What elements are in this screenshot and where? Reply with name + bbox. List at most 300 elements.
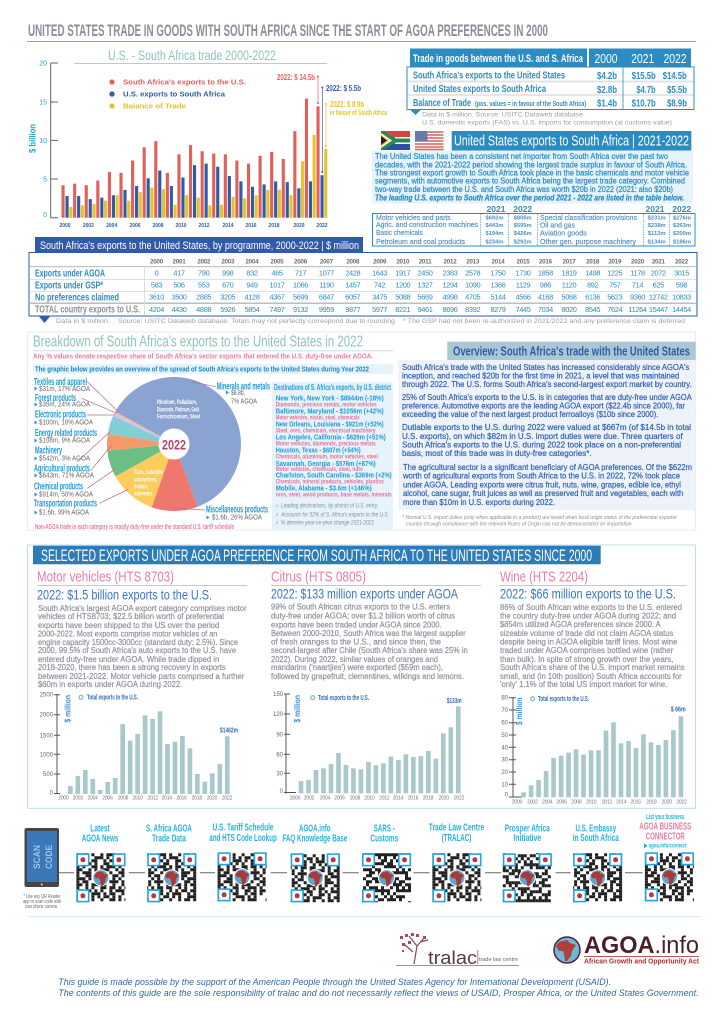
row: exports under AGOA: 2383 xyxy=(442,268,458,278)
column: wine xyxy=(500,569,687,689)
column: wine: the country duty-free under AGOA during 2022; and xyxy=(500,612,676,620)
text block: overview: through 2022. The U.S. forms South Africa's second-largest export market by country. xyxy=(402,380,692,389)
sector labels: $914m, 50% AGOA xyxy=(39,492,93,498)
heading: overview xyxy=(447,342,696,360)
icon: South Africa flag xyxy=(381,131,410,150)
donut chart: 2022 exports by sector: Cars, catalytic xyxy=(134,470,163,476)
row: exports under AGOA: 417 xyxy=(173,268,185,278)
y axis: 5 xyxy=(43,176,47,184)
row: total country exports: 4888 xyxy=(196,305,211,314)
row: no preferences claimed: 5144 xyxy=(490,293,506,302)
row: exports under AGOA: 1643 xyxy=(372,268,387,278)
column: wine: Wine (HTS 2204) xyxy=(500,569,588,586)
row: exports under GSP: 1457 xyxy=(345,281,361,290)
table: leading U.S. exports: 2021 xyxy=(646,204,665,214)
bar chart: wine: 2022 xyxy=(676,800,687,806)
text block: U.S. exports summary: The strongest export growth to South Africa took place in the basic chemicals and motor vehicle xyxy=(375,168,690,178)
bar chart: motor vehicles: 2006 xyxy=(102,796,113,802)
sector labels: $8.8b, xyxy=(231,390,245,397)
table: leading U.S. exports: 2021 xyxy=(487,204,506,214)
row: no preferences claimed: 6847 xyxy=(319,293,334,302)
bar chart: motor vehicles: Total exports to the U.S. xyxy=(87,695,138,702)
sector labels: $35m, 24% AGOA xyxy=(39,402,90,408)
column: citrus: duty-free under AGOA; over $1.2 billion worth of citrus xyxy=(271,612,455,620)
panel: destinations by U.S. district: New Orleans, Louisiana - $921m (+52%) xyxy=(276,420,384,429)
bar chart: wine: 2000 xyxy=(512,800,523,806)
row: no preferences claimed: 4168 xyxy=(538,293,553,302)
table: leading U.S. exports: Aviation goods xyxy=(540,228,587,238)
row: exports under GSP xyxy=(35,280,687,292)
row: exports under AGOA xyxy=(35,268,689,280)
year header: 2017 xyxy=(563,258,576,266)
bar chart: wine: $ million xyxy=(514,698,524,725)
year header: 2005 xyxy=(271,258,284,266)
bar chart: motor vehicles: 2012 xyxy=(148,796,158,802)
text block: overview: U.S. exports), on which $82m in U.S. import duties were due. Three quarters of xyxy=(402,432,683,441)
bar chart: motor vehicles: 2022 xyxy=(222,796,232,802)
year header: 2010 xyxy=(396,258,410,266)
QR: U.S. Tariff Schedule and HTS Code Lookup: U.S. Tariff Schedule xyxy=(212,823,274,834)
QR: AGOA Business Connector: CONNECTOR xyxy=(646,831,685,842)
sector labels: $1.6b, 26% AGOA xyxy=(212,514,262,522)
donut chart: 2022 exports by sector: bodies, xyxy=(134,484,148,490)
column: wine: 2022: $66 million exports to the U.S. xyxy=(500,587,676,602)
text block: overview: exceeding the value of the next largest product ferroalloys ($10b since 2000). xyxy=(402,410,658,419)
table: trade in goods between the U.S. and S. Africa: $1.4b xyxy=(597,98,617,110)
row: total country exports: 8221 xyxy=(395,305,411,314)
panel: destinations by U.S. district: Destinations of S. Africa's exports, by U.S. district xyxy=(274,382,391,392)
row: total country exports: 7034 xyxy=(538,305,553,314)
row: exports under AGOA: 3015 xyxy=(674,268,689,278)
panel: destinations by U.S. district: Chemicals, aluminium, motor vehicles, steel xyxy=(276,454,378,461)
row: no preferences claimed: 12742 xyxy=(649,293,668,302)
bar chart: citrus: $133m xyxy=(447,696,462,705)
sector labels: Miscellaneous products xyxy=(206,505,268,516)
column: motor vehicles xyxy=(37,569,247,689)
row: total country exports: 8020 xyxy=(561,305,577,314)
row: exports under AGOA: 1178 xyxy=(630,268,645,278)
y axis: 20 xyxy=(39,60,47,68)
row: exports under GSP: 670 xyxy=(222,281,234,290)
row: total country exports: 5926 xyxy=(220,305,236,314)
row: total country exports: TOTAL country exports to U.S. xyxy=(35,304,140,316)
year header: 2007 xyxy=(320,258,334,266)
donut chart: 2022 exports by sector xyxy=(107,377,241,511)
sector labels: Transportation products xyxy=(34,499,97,510)
row: total country exports: 7624 xyxy=(607,305,623,314)
sector labels: Forest products xyxy=(35,393,76,404)
QR: U.S. Embassy in South Africa: U.S. Embassy xyxy=(575,823,616,834)
bar chart: wine: 2018 xyxy=(646,800,657,806)
bar chart: citrus: 30 xyxy=(276,771,284,777)
column: motor vehicles: 2022: $1.5 billion exports to the U.S. xyxy=(37,588,212,603)
panel: destinations by U.S. district: Charlston, South Carolina - $369m (+2%) xyxy=(276,470,392,479)
bar chart: wine: 20 xyxy=(501,770,509,776)
table: trade in goods between the U.S. and S. Africa: (pos. values = in favour of the South Africa) xyxy=(475,101,586,108)
text block: overview: alcohol, cane sugar, fruit juices as well as preserved fruit and vegetables, each with xyxy=(403,489,684,498)
panel: destinations by U.S. district: ores, steel, wood products, base metals, minerals xyxy=(276,492,392,499)
x axis labels: 2022 xyxy=(316,223,328,229)
x axis labels: 2004 xyxy=(106,223,117,229)
donut chart: 2022 exports by sector: converters, xyxy=(134,478,157,484)
x axis labels: 2012 xyxy=(198,223,210,229)
column: citrus: followed by grapefruit, clementines, wilkings and lemons. xyxy=(271,672,464,681)
table: leading U.S. exports: Petroleum and coal products xyxy=(376,237,465,246)
column: citrus: Citrus (HTS 0805) xyxy=(271,569,366,586)
row: exports under AGOA: 1730 xyxy=(515,268,531,278)
column: wine: sizeable volume of trade did not claim AGOA status xyxy=(500,629,673,638)
row: total country exports: 11264 xyxy=(628,305,647,314)
bar chart: wine: 40 xyxy=(501,745,509,751)
bar chart: wine: 2004 xyxy=(542,800,553,806)
QR: S. Africa AGOA Trade Data xyxy=(146,823,196,902)
QR: U.S. Tariff Schedule and HTS Code Lookup: and HTS Code Lookup xyxy=(209,833,277,844)
bar chart: wine: 30 xyxy=(501,758,509,764)
year header: 2018 xyxy=(586,258,600,266)
row: exports under AGOA: 1498 xyxy=(585,268,600,278)
column: citrus: second-largest after Chile (South Africa's share was 25% in xyxy=(271,646,468,655)
row: exports under GSP: 1090 xyxy=(465,281,480,290)
callout: 2022 values: 2022: $ 14.5b xyxy=(277,73,315,82)
table: leading U.S. exports: $276m xyxy=(673,216,691,222)
sector labels: Electronic products xyxy=(35,409,86,420)
bar chart: motor vehicles: 2020 xyxy=(207,796,218,802)
bar chart: wine: 0 xyxy=(505,792,509,798)
column: motor vehicles: vehicles of HTS8703; $22.5 billion worth of preferential xyxy=(38,612,224,621)
QR: Prosper Africa Initiative xyxy=(504,823,551,902)
sector labels: Minerals and metals xyxy=(217,381,270,392)
legend: U.S. exports to South Africa xyxy=(123,90,226,98)
QR: SARS - Customs xyxy=(363,823,410,902)
column: motor vehicles: $60m in exports under AGOA during 2022. xyxy=(38,680,182,689)
text block: overview: Dutiable exports to the U.S. during 2022 were valued at $667m (of $14.5b in total xyxy=(402,423,691,432)
row: exports under GSP: 1190 xyxy=(319,281,334,290)
text block: overview: South Africa's trade with the United States has increased considerably since AGOA's xyxy=(402,363,689,372)
text block: overview: under AGOA. Leading exports were citrus fruit, nuts, wine, grapes, edible ice, ethyl xyxy=(403,480,681,489)
row: exports under GSP: 986 xyxy=(540,281,551,290)
sector labels xyxy=(34,377,270,522)
note: scan instructions xyxy=(23,894,61,910)
year header: 2004 xyxy=(246,258,259,266)
bar chart: wine: 2020 xyxy=(662,800,672,806)
year header: 2014 xyxy=(492,258,505,266)
heading: breakdown: Breakdown of South Africa's exports to the United States in 2022 xyxy=(33,334,363,351)
row: no preferences claimed: No preferences claimed xyxy=(35,292,119,304)
row: exports under AGOA: 1819 xyxy=(561,268,577,278)
panel: destinations by U.S. district: Baltimore, Maryland - $1056m (+42%) xyxy=(276,407,384,416)
row: no preferences claimed: 5623 xyxy=(607,293,623,302)
bars: South Africa's exports to the U.S. xyxy=(62,99,320,218)
bar chart: motor vehicles: 0 xyxy=(50,791,54,797)
year header: 2012 xyxy=(444,258,457,266)
table: leading U.S. exports: Basic chemicals xyxy=(376,228,423,237)
column: wine: despite being in AGOA eligible tariff lines. Most wine xyxy=(500,638,677,646)
QR: S. Africa AGOA Trade Data: Trade Data xyxy=(152,834,186,845)
y axis: 15 xyxy=(39,100,47,106)
QR: U.S. Embassy in South Africa: in South Africa xyxy=(573,833,619,844)
row: no preferences claimed: 6057 xyxy=(345,293,361,302)
text block: overview: preference. Automotive exports are the leading AGOA export ($22.4b since 2000), far xyxy=(402,401,685,410)
logo: tralac: tralac xyxy=(428,948,477,968)
column: motor vehicles: Motor vehicles (HTS 8703) xyxy=(37,569,174,586)
row: total country exports: 7445 xyxy=(515,305,531,314)
year header: 2011 xyxy=(419,258,432,266)
row: total country exports: 9461 xyxy=(417,305,433,314)
year header: 2022 xyxy=(675,258,689,266)
row: exports under GSP: 625 xyxy=(653,281,664,290)
bar chart: citrus: 2022 xyxy=(454,796,465,802)
table: leading U.S. exports: Oil and gas xyxy=(540,220,575,230)
icon: United States flag xyxy=(415,131,444,150)
panel: destinations by U.S. district: % denotes year-on-year change 2021-2022 xyxy=(281,521,375,527)
row: no preferences claimed: 5699 xyxy=(293,293,308,302)
x axis labels: 2014 xyxy=(222,223,234,229)
row: exports under AGOA: 2072 xyxy=(651,268,666,278)
column: motor vehicles: engine capacity 1500cc-3000cc (standard duty: 2.5%). Since xyxy=(38,638,238,647)
table: leading U.S. exports xyxy=(372,204,695,246)
intro band xyxy=(33,364,393,374)
footer: funding statement: This guide is made possible by the support of the American People through the United States Agency for International Development (USAID). xyxy=(58,977,611,987)
bar chart: citrus: 0 xyxy=(280,789,284,795)
QR: AGOA Business Connector: ▶ agoa.info/connect xyxy=(643,842,687,850)
row: exports under GSP: 742 xyxy=(374,281,385,290)
row: no preferences claimed: 9360 xyxy=(630,293,645,302)
table: leading U.S. exports: $231m xyxy=(648,216,666,222)
footnote: import duties xyxy=(402,515,678,528)
table: trade in goods between the U.S. and S. Africa: $14.5b xyxy=(663,70,687,82)
QR: AGOA.info FAQ Knowledge Base xyxy=(282,823,347,902)
logo: tralac: trade law centre xyxy=(479,957,518,963)
table: exports by programme xyxy=(29,252,697,316)
row: no preferences claimed: 5669 xyxy=(417,293,433,302)
row: no preferences claimed: 4128 xyxy=(244,293,260,302)
panel: destinations by U.S. district: Chemicals, mineral products, vehicles, plastics xyxy=(276,479,384,486)
bar chart: wine xyxy=(501,696,687,806)
row: exports under GSP: 553 xyxy=(198,281,210,290)
row: exports under AGOA: 2578 xyxy=(465,268,480,278)
column: citrus: mandarins ('naartjies') were exported ($59m each), xyxy=(271,663,443,672)
row: total country exports xyxy=(35,304,691,316)
x axis labels: 2018 xyxy=(268,223,280,229)
row: exports under AGOA: 1750 xyxy=(490,268,506,278)
row: exports under AGOA: 2428 xyxy=(345,268,361,278)
icon: phone with scan code: SCAN xyxy=(32,845,42,869)
column: wine: 86% of South African wine exports to the U.S. entered xyxy=(500,603,682,612)
year header: 2015 xyxy=(517,258,530,266)
row: total country exports: 15447 xyxy=(649,305,668,314)
panel: selected exports under AGOA xyxy=(28,545,696,808)
text block: overview: more than $10m in U.S. exports during 2022. xyxy=(403,498,555,507)
bar chart: motor vehicles: $1462m xyxy=(220,726,238,734)
text block: U.S. exports summary: two-way trade between the U.S. and South Africa was worth $20b in 2022 (2021: also $20b) xyxy=(375,185,673,194)
table: trade in goods between the U.S. and S. Africa: $15.5b xyxy=(632,70,656,82)
row: no preferences claimed: 4705 xyxy=(465,293,480,302)
year header: 2001 xyxy=(173,258,186,266)
QR: Trade Law Centre (TRALAC) xyxy=(429,823,485,902)
year header: 2002 xyxy=(197,258,211,266)
table: trade in goods between the U.S. and S. Africa: $8.9b xyxy=(667,98,687,110)
panel: destinations by U.S. district: Motor vehicles, diamonds, precious metals xyxy=(276,441,376,448)
column: wine: than bulk). In spite of strong growth over the years, xyxy=(500,655,673,664)
table: leading U.S. exports: $113m xyxy=(648,231,666,237)
row: total country exports: 4430 xyxy=(171,305,187,314)
table: trade in goods between the U.S. and S. Africa: Trade in goods between the U.S. and S. Africa xyxy=(413,53,584,65)
row: exports under AGOA: 2450 xyxy=(417,268,433,278)
QR: AGOA Business Connector xyxy=(639,814,694,901)
sector labels: $1.6b, 99% AGOA xyxy=(39,510,89,516)
footnote: import duties: country through compliance with the relevant Rules of Origin can not be demonstrated on importation. xyxy=(406,522,633,528)
column: citrus: of fresh oranges to the U.S., and since then, the xyxy=(271,638,441,646)
panel: destinations by U.S. district: Diamonds, precious metals, motor vehicles xyxy=(276,402,377,408)
year header: 2008 xyxy=(346,258,360,266)
row: total country exports: 8696 xyxy=(442,305,458,314)
row: exports under GSP: 714 xyxy=(632,281,643,290)
table: leading U.S. exports: Other gen. purpose machinery xyxy=(540,237,636,246)
row: exports under AGOA: 1077 xyxy=(319,268,334,278)
bar chart: citrus: Total exports to the U.S. xyxy=(318,695,369,702)
text block: U.S. exports summary: decades, with the 2021-2022 period showing the largest trade surplus in favour of South Africa. xyxy=(375,160,687,170)
bar chart: citrus: 2000 xyxy=(290,796,301,802)
bar chart: citrus: 60 xyxy=(276,752,284,758)
bar chart: motor vehicles: 2002 xyxy=(73,796,83,802)
bar chart: wine: 2008 xyxy=(571,800,582,806)
year header: 2009 xyxy=(373,258,387,266)
table: trade in goods between the U.S. and S. Africa: $10.7b xyxy=(632,98,656,110)
icon: phone with scan code xyxy=(24,828,59,887)
x axis labels: 2010 xyxy=(175,223,187,229)
year header: 2000 xyxy=(150,258,164,266)
row: no preferences claimed: 3475 xyxy=(372,293,387,302)
row: total country exports: 8545 xyxy=(585,305,600,314)
panel: breakdown of exports xyxy=(28,332,696,531)
y axis: $ billion xyxy=(28,124,38,153)
x axis labels: 2020 xyxy=(293,223,305,229)
row: exports under AGOA: 717 xyxy=(295,268,306,278)
row: exports under GSP: 1294 xyxy=(442,281,458,290)
row: no preferences claimed: 5068 xyxy=(561,293,577,302)
row: exports under AGOA: 1917 xyxy=(395,268,411,278)
y axis xyxy=(28,60,58,219)
QR: Prosper Africa Initiative: Prosper Africa xyxy=(505,823,550,834)
row: no preferences claimed: 4367 xyxy=(269,293,285,302)
bar chart: motor vehicles: 2008 xyxy=(118,796,129,802)
table: trade in goods between the U.S. and S. Africa: 2022 xyxy=(664,51,686,66)
panel: destinations by U.S. district: Accounts for 52% of S. Africa's exports to the U.S. xyxy=(280,513,389,519)
row: exports under GSP: 1200 xyxy=(395,281,411,290)
text block: overview: South Africa's exports to the U.S. during 2022 took place on a non-preferential xyxy=(402,441,681,450)
panel: destinations by U.S. district: Motor vehicles, nickel, steel, chemicals xyxy=(276,415,360,422)
donut chart: 2022 exports by sector: solvents xyxy=(134,492,152,498)
table: leading U.S. exports: Agric. and construction machines xyxy=(376,220,478,229)
bar chart: motor vehicles: 2500 xyxy=(40,693,54,699)
text block: overview: basis, most of this trade was in duty-free categories*. xyxy=(402,449,592,458)
column: citrus xyxy=(271,569,481,681)
table: leading U.S. exports: $238m xyxy=(648,223,666,229)
source note: programme table: Data in $ million. xyxy=(56,318,110,325)
panel: destinations by U.S. district: Motor vehicles, chemicals, steel, nuts xyxy=(276,466,363,473)
table: trade in goods between the U.S. and S. Africa: U.S. domestic exports (FAS) vs. U.S. imports for consumption (at customs value) xyxy=(422,120,672,126)
y axis: 10 xyxy=(39,138,47,145)
year header xyxy=(150,258,689,266)
bar chart: wine: 60 xyxy=(501,721,509,727)
logo: AGOA.info: African Growth and Opportunity Act xyxy=(584,958,700,966)
bar chart: citrus: 2008 xyxy=(350,796,361,802)
column: wine: small, and (in 10th position) South Africa accounts for xyxy=(500,672,682,681)
column: motor vehicles: between 2021-2022. Motor vehicle parts comprised a further xyxy=(38,672,245,681)
table: trade in goods between the U.S. and S. Africa: Data in $ million. Source: USITC Dataweb database. xyxy=(422,112,585,118)
table: leading U.S. exports: $595m xyxy=(514,223,532,229)
bar chart: citrus: 150 xyxy=(273,692,284,698)
QR: Prosper Africa Initiative: Initiative xyxy=(513,833,541,844)
icon: phone with scan code: CODE xyxy=(44,845,54,869)
row: exports under GSP: 1129 xyxy=(516,281,530,290)
footnote: import duties: * Normal U.S. import duties (only when applicable to a product) are levied when local origin status of the preferential exporter xyxy=(402,515,678,521)
row: total country exports: 8392 xyxy=(465,305,480,314)
year header: 2006 xyxy=(294,258,308,266)
x axis labels: 2006 xyxy=(129,223,141,229)
table: leading U.S. exports: $692m xyxy=(485,216,504,222)
row: exports under GSP: 1066 xyxy=(293,281,308,290)
year header: 2019 xyxy=(608,258,622,266)
year header: 2020 xyxy=(631,258,645,266)
bar chart: wine: 10 xyxy=(501,782,509,788)
column: citrus: Between 2000-2010, South Africa was the largest supplier xyxy=(271,629,466,638)
bar chart: citrus: 2020 xyxy=(438,796,449,802)
column: wine: 'only' 1.1% of the total US import market for wine. xyxy=(500,680,667,689)
sector labels: $31m, 17% AGOA xyxy=(39,386,90,393)
column: wine: South Africa's share of the U.S. import market remains xyxy=(500,663,685,672)
table: leading U.S. exports: $134m xyxy=(648,240,666,246)
row: no preferences claimed xyxy=(35,292,691,304)
sector labels: $100m, 10% AGOA xyxy=(39,420,93,426)
bar chart: wine: $ 66m xyxy=(671,704,686,714)
row: total country exports: 9959 xyxy=(319,305,334,314)
callout: 2022 values xyxy=(277,73,387,173)
donut chart: 2022 exports by sector: Diamonds, Platinum, Gold xyxy=(157,408,199,414)
sector labels: Textiles and apparel xyxy=(34,377,87,388)
QR: Latest AGOA News: AGOA News xyxy=(82,834,119,845)
panel: destinations by U.S. district: Savannah, Georgia - $576m (+87%) xyxy=(276,459,376,468)
bar chart: citrus: 2014 xyxy=(393,796,404,802)
bar chart: motor vehicles xyxy=(40,693,238,802)
row: exports under AGOA: 998 xyxy=(222,268,234,278)
table: leading U.S. exports: $263m xyxy=(673,223,691,229)
row: exports under GSP: 892 xyxy=(587,281,598,290)
row: total country exports: 5977 xyxy=(372,305,387,314)
table: trade in goods between the U.S. and S. Africa: $4.2b xyxy=(597,70,617,82)
QR: Trade Law Centre (TRALAC): Trade Law Centre xyxy=(429,823,485,834)
QR: AGOA Business Connector: AGOA BUSINESS xyxy=(639,821,692,832)
heading: exports by programme xyxy=(35,237,363,252)
bar chart: citrus: 2010 xyxy=(364,796,375,802)
year header: 2003 xyxy=(221,258,235,266)
sector labels: Machinery xyxy=(35,446,62,457)
bar chart: motor vehicles: 2010 xyxy=(132,796,143,802)
QR: AGOA Business Connector: List your business xyxy=(646,814,684,821)
bar chart: motor vehicles: 1000 xyxy=(40,752,54,758)
row: no preferences claimed: 6136 xyxy=(585,293,600,302)
note: non-AGOA trade: Non-AGOA trade in each category is mostly duty-free under the standard U.S. tariff schedule xyxy=(35,522,234,531)
row: exports under GSP: 1366 xyxy=(490,281,506,290)
row: exports under GSP: 1120 xyxy=(562,281,576,290)
row: total country exports: 7497 xyxy=(269,305,285,314)
QR: Trade Law Centre (TRALAC): (TRALAC) xyxy=(442,833,471,844)
QR: U.S. Tariff Schedule and HTS Code Lookup xyxy=(209,823,277,901)
bar chart: motor vehicles: $ million xyxy=(62,695,72,722)
table: leading U.S. exports: $443m xyxy=(485,223,504,229)
row: no preferences claimed: 10833 xyxy=(672,293,691,302)
column: citrus: exports have been traded under AGOA since 2000. xyxy=(271,620,442,630)
